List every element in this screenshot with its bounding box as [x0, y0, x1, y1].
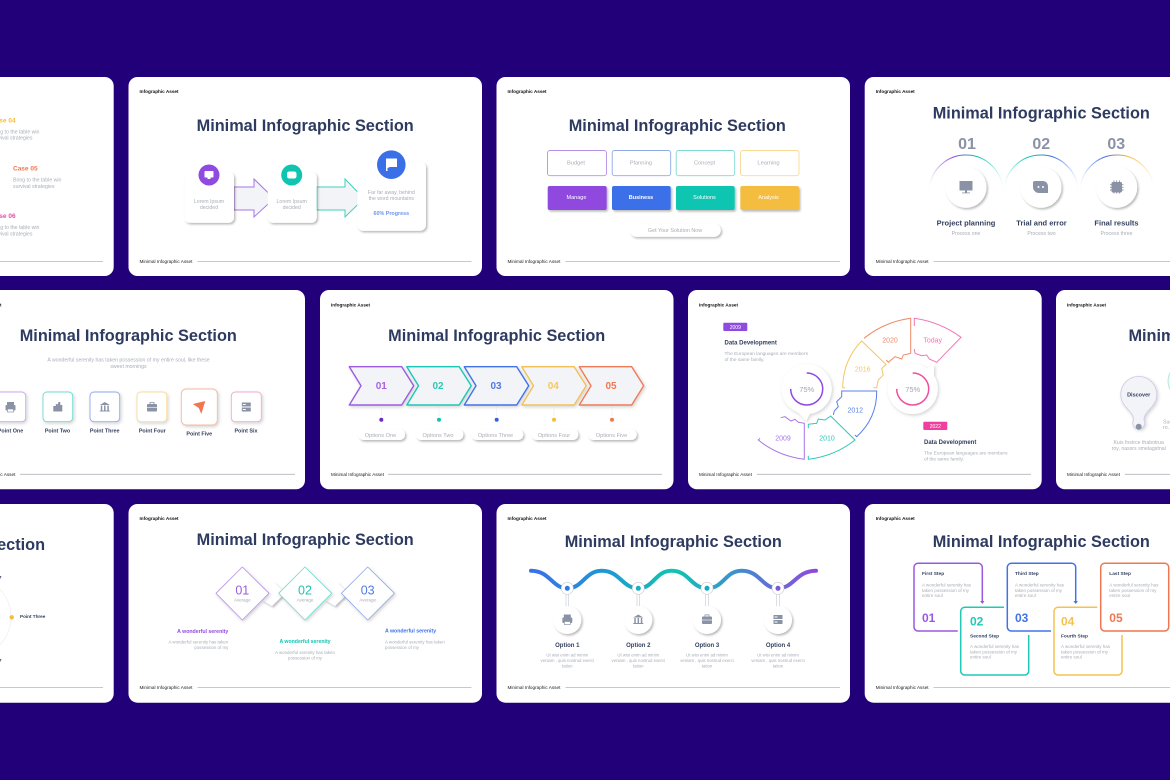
pill button: Get Your Solution Now: [648, 228, 702, 234]
chevrons: [349, 367, 644, 405]
box 04: A wonderful serenity has: [1061, 644, 1111, 649]
bulb description: [1112, 440, 1166, 452]
panel: interlocking steps: [865, 504, 1170, 703]
option 3 text: veniam , quis nostrud exerci: [680, 658, 734, 663]
point three: [10, 614, 46, 620]
text right: A wonderful serenity: [385, 628, 436, 634]
filled boxes: [548, 186, 799, 210]
title: Minimal Infographic Section: [388, 327, 605, 345]
point labels cropped: [0, 574, 2, 662]
box 04: 04: [1061, 614, 1075, 628]
panel: interlocking steps: Minimal Infographic Asset: [876, 685, 929, 690]
step numbers: 03: [1107, 136, 1125, 153]
diamond 02: 02: [298, 584, 312, 598]
diamond 03: Average: [359, 598, 377, 602]
filled labels: Business: [629, 195, 653, 201]
option 2 text: Option 2: [626, 643, 651, 649]
box 01: First Step: [922, 571, 944, 577]
option 4 text: [751, 643, 805, 668]
option 1 text: Option 1: [555, 643, 580, 649]
panel: diamonds: [128, 504, 482, 703]
card three: the word mountains: [369, 196, 414, 202]
box 04: Fourth Step: [1061, 633, 1088, 639]
text center: [275, 639, 335, 661]
option pills: [358, 429, 637, 440]
point labels: Point Three: [90, 428, 120, 434]
text left: [169, 629, 229, 650]
filled labels: Solutions: [693, 195, 716, 201]
pin 4: [772, 582, 784, 607]
chevron numbers: 02: [432, 381, 444, 392]
box 01: A wonderful serenity has: [922, 582, 972, 588]
outlined labels: Budget: [567, 160, 585, 166]
card two: Lorem Ipsum: [277, 199, 307, 205]
box 05: taken possession of my: [1109, 588, 1157, 593]
panel: bulbs (cropped): [1056, 290, 1170, 489]
diamond 03: 03: [361, 584, 375, 598]
step numbers: [958, 136, 1125, 153]
year labels: 2010: [819, 436, 835, 442]
chevron numbers: 04: [548, 381, 559, 392]
labels: [937, 218, 1139, 237]
panel: button grid: Minimal Infographic Asset: [508, 259, 561, 264]
text center: A wonderful serenity: [279, 639, 331, 645]
option 4 text: Ut wisi enim ad minim: [757, 652, 799, 658]
segment today: [914, 318, 961, 362]
card one: decided: [200, 205, 218, 211]
option labels: Options Five: [596, 433, 627, 439]
option labels: Options Four: [538, 433, 570, 439]
icon: chart: [53, 402, 62, 412]
text block right: The European languages are members: [924, 451, 1008, 457]
case 04: [0, 118, 40, 142]
option labels: Options Three: [478, 433, 513, 439]
panel: three processes: Minimal Infographic Asset: [876, 259, 929, 264]
arrow purple: [234, 179, 274, 217]
point labels: Point Six: [234, 428, 258, 434]
diamond 01: [216, 567, 269, 620]
connectors: [262, 582, 348, 606]
segment 2020: [864, 318, 911, 362]
panel: three processes: Infographic Asset: [876, 89, 915, 94]
option 4 text: veniam , quis nostrud exerci: [751, 658, 805, 663]
panel: six points: [0, 290, 305, 489]
case 05: survival strategies: [13, 184, 55, 190]
box 01: 01: [922, 611, 936, 625]
diamond 01: 01: [235, 584, 249, 598]
panel: button grid: [496, 77, 850, 276]
diamond 02: [279, 567, 332, 620]
segment 2009: [758, 417, 804, 459]
dots: [379, 407, 614, 422]
badge 2009: [723, 323, 747, 331]
box 04: entire soul: [1061, 655, 1082, 660]
year labels: Today: [923, 338, 943, 344]
box 05: Last Step: [1109, 571, 1131, 577]
gauge right: 75%: [905, 385, 921, 394]
chevron numbers: 03: [490, 381, 502, 392]
box 03: Third Step: [1015, 571, 1039, 577]
panel: cases (cropped): [0, 77, 114, 276]
circle: trial and error: [1020, 167, 1062, 208]
arrow teal: [317, 179, 364, 217]
labels: Process two: [1027, 231, 1056, 237]
title: Minimal Infographic Section: [565, 533, 782, 551]
panel: chevrons: Minimal Infographic Asset: [331, 472, 385, 477]
filled labels: Analysis: [758, 195, 779, 201]
year labels: 2016: [855, 367, 871, 374]
option 2 text: Ut wisi enim ad minim: [617, 652, 660, 658]
box 05: 05: [1109, 611, 1123, 625]
wave: [531, 571, 816, 588]
case 06: [0, 213, 40, 237]
pill button: [630, 224, 721, 237]
card two: decided: [283, 205, 301, 211]
bulb description: Kuis fostrce thabotrua: [1113, 440, 1164, 446]
box 03: taken possession of my: [1015, 588, 1063, 593]
icon: printer: [6, 402, 16, 412]
chevron numbers: [376, 381, 617, 392]
icon: briefcase: [702, 615, 712, 624]
title: Minimal Infographic Section: [933, 533, 1150, 551]
panel: chevrons: Infographic Asset: [331, 302, 370, 308]
year labels: 2020: [882, 338, 898, 344]
year labels: 2012: [848, 408, 863, 414]
box 03: [1007, 563, 1078, 631]
icon: send arrow: [193, 401, 205, 414]
panel: timeline gears: Infographic Asset: [699, 302, 738, 308]
case 05: Bring to the table win: [13, 178, 62, 184]
icon: printer: [562, 614, 572, 624]
option 1 text: veniam , quis nostrud exerci: [541, 658, 594, 663]
bulb discover: [1121, 376, 1157, 430]
pin 1: [561, 582, 573, 607]
year labels: [775, 338, 943, 442]
point three: Point Three: [20, 614, 46, 619]
text block left: [724, 340, 809, 363]
circle: project planning: [946, 167, 986, 208]
pin 2: [632, 582, 644, 607]
box 04: [1054, 607, 1122, 675]
box 05: entire soul: [1109, 593, 1130, 598]
card one: Lorem Ipsum: [194, 199, 224, 205]
option 1 text: tation: [562, 664, 573, 668]
box 01: entire soul: [922, 593, 943, 598]
box 02: 02: [970, 614, 984, 628]
text center: possession of my: [288, 656, 323, 661]
box 02: [961, 607, 1029, 675]
step numbers: 01: [958, 136, 976, 153]
point labels: Point Five: [186, 432, 212, 438]
case 05: Case 05: [13, 166, 38, 172]
option 4 text: tation: [773, 664, 784, 668]
subtitle: A wonderful serenity has taken possession of my entire soul, like these: [47, 358, 210, 364]
point labels: [0, 428, 258, 438]
icon: briefcase: [147, 402, 157, 412]
title: Minimal Infographic Section: [197, 531, 414, 549]
segment 2010: [808, 416, 855, 459]
panel: chevrons: [320, 290, 674, 489]
title: Minimal Infographic Section: [569, 117, 786, 135]
panel: three processes: [865, 77, 1170, 276]
bulb discover: Discover: [1127, 392, 1151, 398]
box 05: [1101, 563, 1169, 631]
card three: 60% Progress: [373, 211, 409, 217]
segment 2016: [843, 341, 886, 388]
panel: interlocking steps: Infographic Asset: [876, 516, 915, 521]
outlined labels: Concept: [694, 160, 716, 166]
next bulb (cropped): ro.: [1163, 425, 1169, 431]
badge 2009: 2009: [730, 325, 741, 331]
option labels: [365, 433, 627, 439]
outlined labels: Learning: [757, 160, 780, 166]
text block right: [924, 440, 1008, 463]
box 05: A wonderful serenity has: [1109, 582, 1159, 588]
text block right: Data Development: [924, 440, 976, 446]
case 05: [13, 166, 62, 190]
text block left: Data Development: [724, 340, 777, 346]
segment 2012: [833, 391, 877, 437]
option 1 text: [541, 643, 594, 668]
text center: A wonderful serenity has taken: [275, 650, 335, 655]
option 2 text: tation: [633, 664, 644, 668]
labels: Trial and error: [1016, 218, 1067, 228]
panel: arrow process: [128, 77, 482, 276]
chevron numbers: 05: [605, 381, 617, 392]
panel: timeline gears: [688, 290, 1042, 489]
gauge right: [888, 364, 938, 414]
text right: A wonderful serenity has taken: [385, 640, 445, 645]
option 3 text: Option 3: [695, 643, 720, 649]
title: Minimal Infographic Section: [20, 327, 237, 345]
subtitle: sweet mornings: [110, 364, 147, 370]
labels: Final results: [1094, 218, 1139, 228]
box 02: A wonderful serenity has: [970, 644, 1020, 649]
option 3 text: Ut wisi enim ad minim: [686, 652, 728, 658]
icon: bank: [100, 402, 110, 412]
panel: button grid: Infographic Asset: [508, 89, 547, 94]
card one: [184, 164, 234, 223]
badge 2022: 2022: [930, 424, 941, 430]
option 3 text: tation: [702, 664, 713, 668]
panel: wave timeline: [496, 504, 850, 703]
panel: wave timeline: Infographic Asset: [508, 516, 547, 521]
panel: diamonds: Infographic Asset: [140, 516, 179, 521]
text right: [385, 628, 445, 650]
icon: server: [242, 402, 251, 412]
point labels: Point Four: [139, 428, 167, 434]
option 2 text: veniam , quis nostrud exerci: [612, 658, 665, 663]
box 02: Second Step: [970, 633, 999, 639]
outlined boxes: [548, 150, 799, 176]
icon circles: [553, 606, 792, 634]
text left: A wonderful serenity has taken: [169, 639, 229, 644]
outlined labels: [567, 160, 780, 166]
text block left: The European languages are members: [724, 351, 809, 357]
bulb description: roy, nassrs smelagstnal: [1112, 446, 1166, 452]
option 4 text: Option 4: [766, 643, 791, 649]
option 1 text: Ut wisi enim ad minim: [546, 652, 589, 658]
card three: Far far away, behind: [368, 190, 415, 196]
title: Minimal Infographic Section: [933, 104, 1150, 122]
box 02: entire soul: [970, 655, 991, 660]
text left: possession of my: [194, 645, 229, 650]
box 01: taken possession of my: [922, 588, 970, 593]
radial arc: [0, 576, 11, 658]
panel: timeline gears: Minimal Infographic Asset: [699, 472, 753, 477]
diamond 02: Average: [297, 598, 314, 602]
box 01: [914, 563, 984, 631]
chevron numbers: 01: [376, 381, 387, 392]
diamond 03: [341, 567, 394, 620]
labels: Process one: [952, 231, 981, 237]
box 03: A wonderful serenity has: [1015, 582, 1065, 588]
badge 2022: [923, 422, 947, 430]
card three: [357, 150, 426, 231]
pin 3: [701, 582, 713, 607]
panel: diamonds: Minimal Infographic Asset: [140, 685, 193, 690]
option labels: Options Two: [422, 433, 454, 439]
labels: Process three: [1100, 231, 1133, 237]
filled labels: [567, 195, 779, 201]
circle: final results: [1096, 167, 1137, 208]
title: Minimal Infographic Section: [197, 117, 414, 135]
panel: radial points (cropped): [0, 504, 114, 703]
diamond 01: Average: [234, 598, 251, 602]
labels: Project planning: [937, 218, 996, 228]
text right: possession of my: [385, 645, 420, 650]
panel: bulbs (cropped): Minimal Infographic Asset: [1067, 472, 1121, 477]
box 02: taken possession of my: [970, 650, 1018, 654]
box 03: 03: [1015, 611, 1029, 625]
year labels: 2009: [775, 436, 791, 442]
option labels: Options One: [365, 433, 396, 439]
gauge left: [782, 364, 832, 421]
panel: arrow process: Infographic Asset: [140, 89, 179, 94]
arcs: [929, 155, 1154, 192]
icon boxes: [0, 389, 261, 425]
panel: bulbs (cropped): Infographic Asset: [1067, 302, 1106, 308]
box 03: entire soul: [1015, 593, 1036, 598]
text block left: of the same family.: [724, 357, 764, 363]
gauge left: 75%: [799, 385, 815, 394]
text block right: of the same family.: [924, 457, 964, 463]
box 04: taken possession of my: [1061, 650, 1109, 654]
subtitle: [47, 358, 210, 370]
icon: server: [774, 615, 782, 624]
filled labels: Manage: [567, 195, 586, 201]
next bulb (cropped): [1163, 363, 1170, 431]
outlined labels: Planning: [630, 160, 652, 166]
text left: A wonderful serenity: [177, 629, 228, 635]
step numbers: 02: [1032, 136, 1050, 153]
point labels: Point Two: [45, 428, 71, 434]
option 2 text: [612, 643, 665, 668]
option 3 text: [680, 643, 734, 668]
icon: bank: [633, 614, 643, 624]
panel: wave timeline: Minimal Infographic Asset: [508, 685, 561, 690]
card two: [268, 164, 317, 223]
panel: arrow process: Minimal Infographic Asset: [140, 259, 193, 264]
